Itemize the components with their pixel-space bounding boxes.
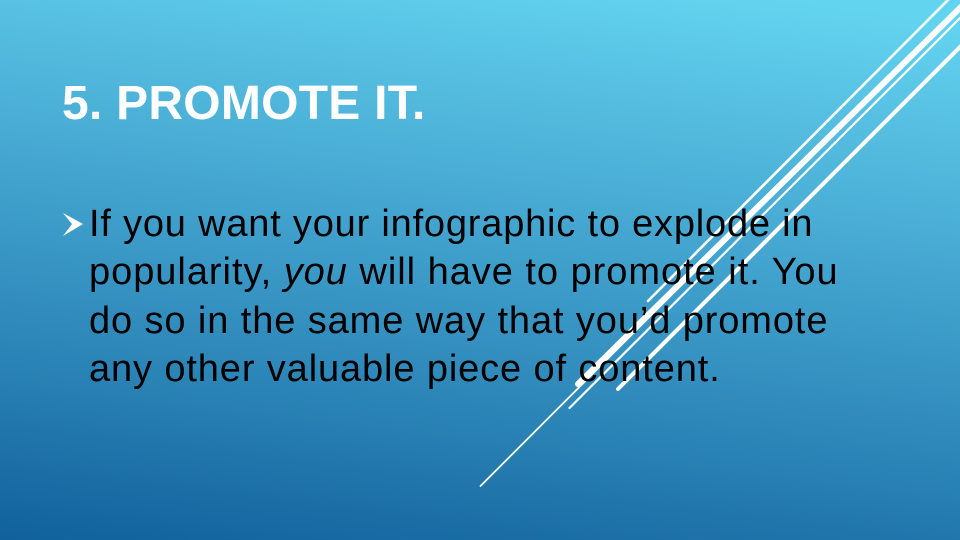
title: 5. PROMOTE IT.: [62, 77, 426, 130]
bullet text block: popularity, you will have to promote it. You: [89, 251, 839, 293]
bullet text block: any other valuable piece of content.: [89, 348, 721, 390]
icon: arrow bullet: [63, 213, 83, 236]
bullet text block: If you want your infographic to explode in: [89, 203, 813, 245]
bullet text block: [63, 203, 839, 390]
bullet text block: do so in the same way that you’d promote: [89, 300, 828, 342]
